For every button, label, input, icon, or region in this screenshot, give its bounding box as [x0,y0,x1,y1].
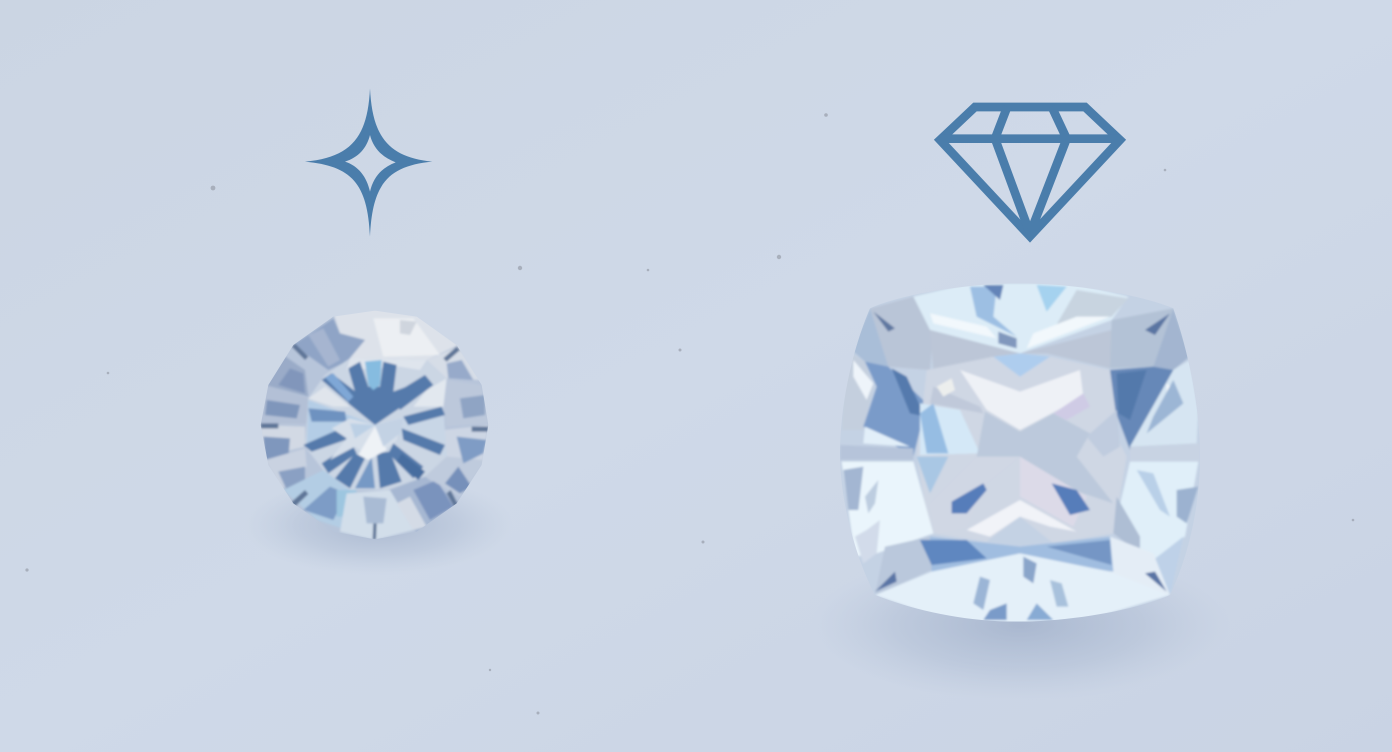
lower side facets [842,462,933,557]
top crown facets [840,283,1200,462]
round brilliant gem [260,311,488,540]
center highlight [330,418,403,460]
background specks [25,113,1354,714]
icon: diamond outline [940,107,1120,236]
left and right side facets [842,353,873,430]
infographic canvas [26,89,1354,714]
outer crown facets [260,308,488,540]
icon: four-point sparkle [305,88,432,237]
center X [977,412,1112,502]
rim notches [261,343,488,539]
table facets [305,358,447,490]
cushion cut gem [833,277,1207,630]
bottom crown facets [877,538,930,592]
radial dark spikes [303,360,445,488]
center table [917,353,1127,543]
gem shadows [243,475,1230,700]
